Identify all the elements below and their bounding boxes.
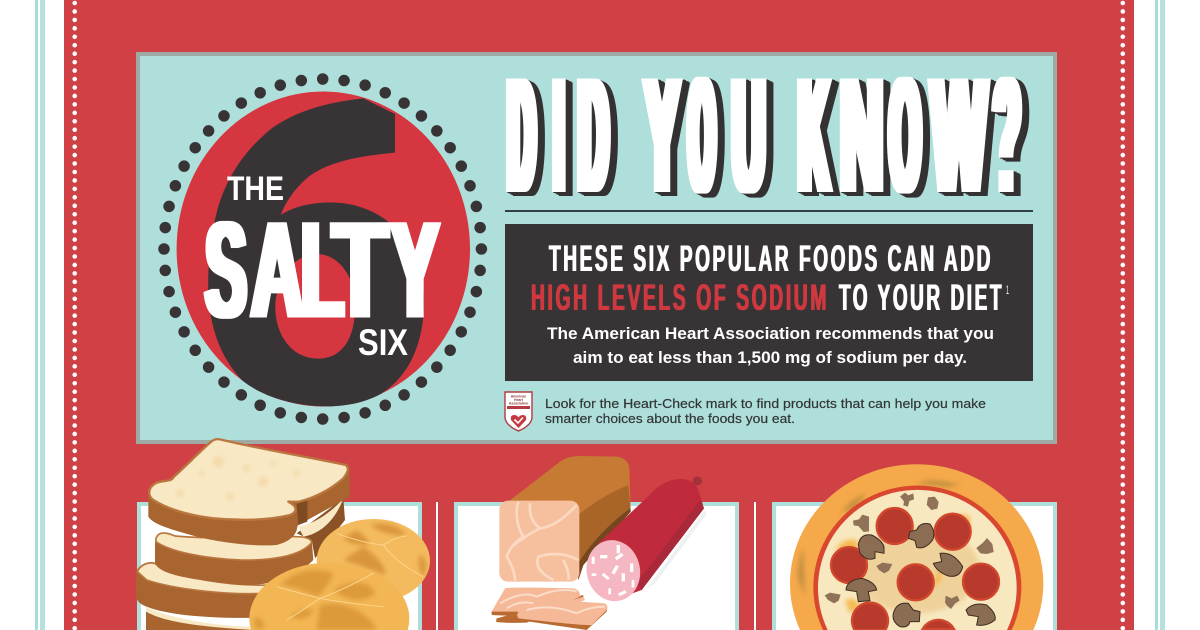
heading: did you know?: O (689, 44, 715, 228)
heading: did you know?: K (798, 43, 829, 228)
back slices (297, 498, 345, 558)
recommendation line one: The American Heart Association recommends that you (547, 325, 994, 343)
headline lines (531, 238, 1004, 318)
salami knot (693, 476, 702, 486)
salty (205, 193, 439, 347)
small mushroom pieces (825, 493, 994, 609)
sauce ring (813, 486, 1021, 630)
panel: did you know background (136, 52, 1057, 444)
red circle (177, 92, 470, 406)
fourth slice (146, 607, 253, 630)
panel: pizza food card (772, 502, 1057, 630)
heading: did you know?: O (890, 43, 920, 228)
ham face (499, 501, 579, 582)
heart-check note line one: Look for the Heart-Check mark to find products that can help you make (545, 397, 986, 411)
salami body (598, 479, 704, 597)
headline lines: HIGH LEVELS OF SODIUM (531, 277, 829, 318)
salami shadow (647, 510, 706, 588)
dotted ring (164, 79, 481, 419)
salami slice face (581, 535, 646, 606)
front roll (249, 563, 409, 630)
heading: did you know?: U (732, 43, 765, 227)
ham slices (496, 595, 583, 623)
panel: deli meat food card (454, 502, 739, 630)
heading: did you know?: D (508, 44, 535, 228)
cheese (818, 490, 1017, 630)
pepperoni (831, 508, 999, 630)
heading: did you know?: D (579, 44, 608, 228)
icon: heart-check mark (505, 392, 532, 431)
ham loaf (508, 456, 631, 580)
salty: A (251, 194, 303, 347)
top slice (148, 467, 350, 545)
callout: sodium message box (505, 224, 1033, 381)
heading: did you know?: ? (994, 43, 1020, 228)
large numeral six (208, 98, 424, 406)
heart-check note line two: smarter choices about the foods you eat. (545, 412, 795, 426)
icon: heart-check mark: Association (509, 402, 528, 406)
salty: Y (391, 194, 439, 347)
six: SIX (358, 322, 408, 363)
headline lines: TO YOUR DIET (839, 277, 1004, 318)
heading: did you know?: W (932, 44, 987, 228)
divider rule (505, 210, 1033, 212)
salty: T (332, 193, 388, 346)
icon: heart-check mark: Heart (514, 398, 524, 402)
the: THE (227, 170, 284, 208)
salty: S (205, 193, 247, 347)
heading: did you know?: I (554, 44, 563, 228)
second slice (155, 540, 313, 585)
heading: did you know?: N (840, 44, 883, 228)
panel: bread food card (137, 502, 422, 630)
heading: did you know?: Y (645, 42, 679, 227)
icon: heart-check mark: American (511, 394, 526, 398)
third slice (136, 562, 278, 618)
crust (790, 464, 1043, 630)
rear roll (317, 519, 430, 602)
mushrooms (846, 523, 995, 627)
callout text: 1 (1006, 283, 1009, 297)
salty: L (301, 194, 344, 347)
recommendation line two: aim to eat less than 1,500 mg of sodium per day. (573, 349, 967, 367)
